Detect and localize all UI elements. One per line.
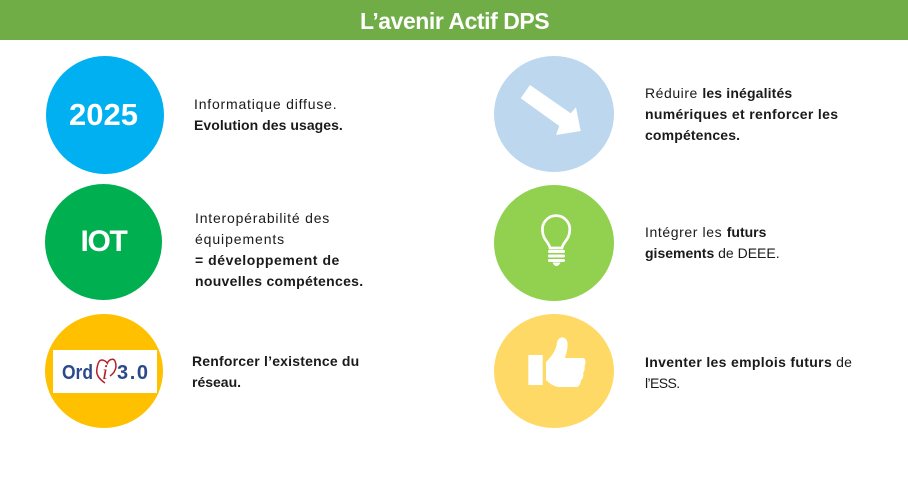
text: inegalites — [645, 85, 838, 143]
icon: arrow circle — [494, 56, 614, 172]
icon: thumb circle — [494, 314, 614, 428]
text: interoperabilite: nouvelles compétences. — [195, 273, 363, 289]
icon: IOT circle — [45, 184, 162, 300]
text: interoperabilite: Interopérabilité des — [195, 210, 330, 226]
icon: 2025 circle: 2025 — [69, 97, 138, 132]
text: emplois: l’ESS. — [645, 375, 680, 391]
text: informatique diffuse — [194, 96, 343, 133]
text: emplois — [645, 354, 852, 391]
text: informatique diffuse: Evolution des usages. — [194, 117, 343, 133]
icon: bulb circle — [494, 185, 614, 301]
text: gisements: gisements de DEEE. — [645, 245, 780, 261]
text: emplois: Inventer les emplois futurs de — [645, 354, 852, 370]
text: informatique diffuse: Informatique diffuse. — [194, 96, 337, 112]
text: interoperabilite: équipements — [195, 231, 285, 247]
icon: Ordi 3.0 circle — [45, 314, 163, 428]
text: inegalites: compétences. — [645, 127, 740, 143]
text: gisements — [645, 224, 780, 261]
text: renforcer reseau — [192, 353, 359, 390]
icon: IOT circle: IOT — [80, 225, 127, 258]
text: renforcer reseau: réseau. — [192, 374, 241, 390]
text: interoperabilite — [195, 210, 363, 289]
text: gisements: Intégrer les futurs — [645, 224, 766, 240]
text: renforcer reseau: Renforcer l’existence du — [192, 353, 359, 369]
logo: Ordi 3.0: i — [102, 360, 108, 384]
title banner — [0, 0, 908, 40]
text: inegalites: Réduire les inégalités — [645, 85, 792, 101]
text: interoperabilite: = développement de — [195, 252, 340, 268]
logo: Ordi 3.0: Ord — [62, 362, 93, 384]
icon: 2025 circle — [46, 56, 164, 174]
text: inegalites: numériques et renforcer les — [645, 106, 838, 122]
logo: Ordi 3.0 — [53, 350, 157, 393]
title banner: L’avenir Actif DPS — [360, 8, 549, 34]
logo: Ordi 3.0: 3.0 — [117, 362, 148, 384]
